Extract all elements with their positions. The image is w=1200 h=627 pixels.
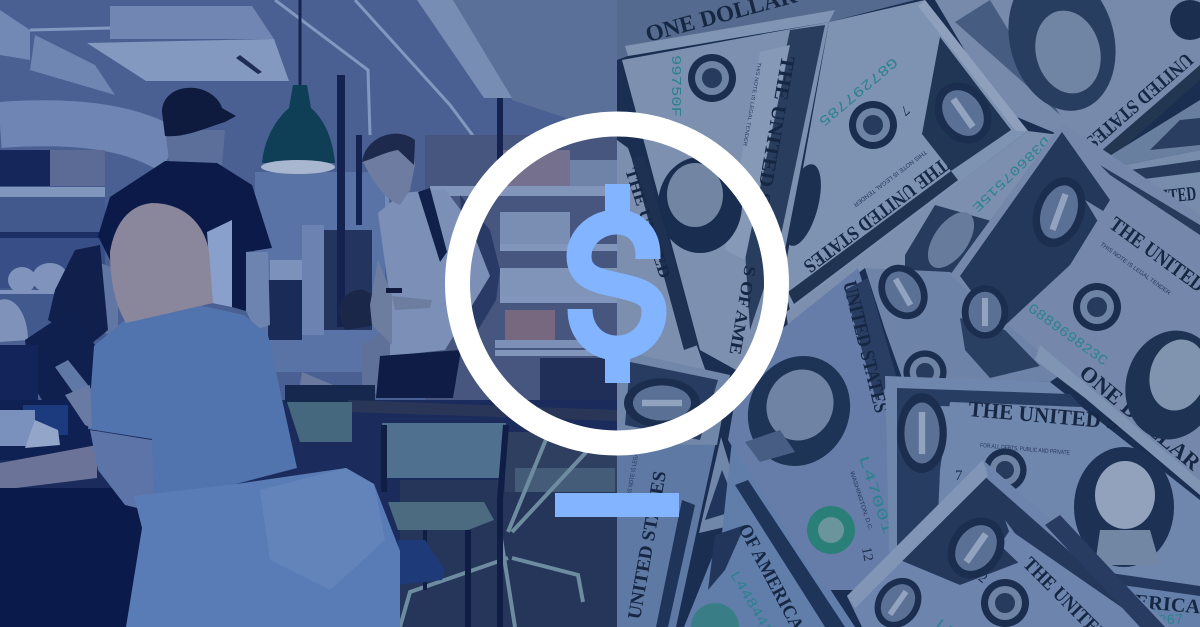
banknote: top edge, one dollar (617, 0, 915, 60)
banknote: upper centre (776, 0, 1028, 310)
banknote: upper centre: 7 (897, 102, 912, 118)
ceiling (0, 0, 568, 400)
banknote: upper left: 99750F (667, 55, 683, 117)
tone overlay (617, 0, 1200, 627)
banknote: upper centre: G87297785 (815, 53, 900, 128)
back wall middle (255, 172, 385, 372)
banknote: top right, portrait (935, 0, 1200, 154)
banknote: behind with serial (786, 131, 1060, 326)
banknote: right, the united g seal: THIS NOTE IS LEGAL TENDER (1099, 242, 1172, 297)
banknote: lower left strip: UNITED STATES (624, 470, 671, 621)
shelves right (425, 135, 617, 410)
chair (382, 423, 506, 627)
left ceiling block (0, 10, 30, 60)
standing man (362, 134, 500, 398)
banknote: top right, portrait: UNITED STATES (1081, 48, 1197, 153)
left table and items (0, 360, 97, 490)
banknote: right, the united g seal: ONE DOLLAR (1075, 360, 1200, 476)
dark doorway (322, 230, 372, 330)
banknote: right, the united g seal: G88969823C (1024, 301, 1110, 370)
banknote: lower left strip: THIS NOTE IS LEGAL (626, 450, 641, 500)
panel: cafe photo (0, 0, 617, 627)
banknote: upper left (622, 22, 829, 375)
banknote: lower left strip (617, 437, 717, 627)
banknote: centre portrait: 12 (858, 546, 875, 562)
dark foreground (0, 488, 150, 627)
chair back left (287, 402, 352, 442)
banknote: bottom centre right (847, 460, 1172, 627)
table legs (400, 437, 590, 627)
panel: banknotes photo (616, 0, 1200, 627)
banknote: bottom centre right: 12 (970, 566, 990, 587)
floor (0, 400, 617, 546)
banknote: medallion near ring: 5 (616, 432, 631, 439)
icon: dollar sign (579, 184, 654, 383)
banknote: left strip (617, 140, 706, 372)
banknote: right, the united g seal (950, 122, 1200, 495)
banknote: upper centre: THE UNITED STATES (799, 154, 952, 277)
banknote: behind with serial: D38607515E (969, 133, 1053, 215)
banknote: bottom left, of america (684, 440, 855, 627)
seated figures left (0, 299, 95, 405)
banknote: bottom right corner (1080, 568, 1200, 627)
man in black shirt (95, 88, 272, 335)
icon: ring (458, 124, 776, 443)
banknote: upper left: S OF AME (725, 264, 760, 356)
air duct left (0, 123, 172, 152)
upper right ceiling (454, 0, 617, 118)
banknote: lower right, the united states: THE UNITED S (968, 396, 1119, 434)
banknote: lower right, the united states: 7 (955, 468, 963, 484)
banknote: lower right, the united states (885, 376, 1200, 590)
cafe table (348, 400, 617, 421)
icon: minus bar (555, 493, 679, 517)
banknote: upper left: THIS NOTE IS LEGAL TENDER (741, 62, 762, 147)
shoe (398, 540, 445, 585)
banknote: under centre (865, 264, 1058, 382)
air duct right (385, 195, 390, 207)
banknote: centre portrait: UNITED STATES (838, 279, 892, 415)
banknote: medallion near ring (616, 350, 730, 445)
backpack and dark figure (48, 245, 108, 345)
ceiling pipes (30, 0, 480, 145)
banknote: far right small (1111, 100, 1200, 165)
banknote: upper centre: THIS NOTE IS LEGAL TENDER (851, 148, 927, 208)
banknote: fan piece (699, 437, 747, 533)
banknote: far right federal (1126, 150, 1200, 215)
pendant lamp (261, 0, 335, 174)
ceiling beam (417, 0, 512, 98)
banknote: centre portrait (728, 268, 900, 590)
banknote: centre portrait: WASHINGTON, D.C. (848, 471, 873, 532)
banknote: left strip: THE UNITED (621, 166, 673, 281)
banknote: lower right, the united states: FOR ALL DEBTS, PUBLIC AND PRIVATE (980, 443, 1070, 457)
banknote: bottom right corner: MERICA (1115, 589, 1200, 618)
seated man (285, 290, 392, 403)
woman with hair and white shirt (65, 203, 400, 627)
pillars (337, 75, 345, 327)
back wall left (0, 150, 105, 340)
ceiling box (30, 35, 115, 95)
air conditioning unit (87, 6, 289, 81)
banknote: centre portrait: L47001 (854, 454, 895, 537)
banknote: upper left: THE UNITED S (751, 54, 799, 206)
